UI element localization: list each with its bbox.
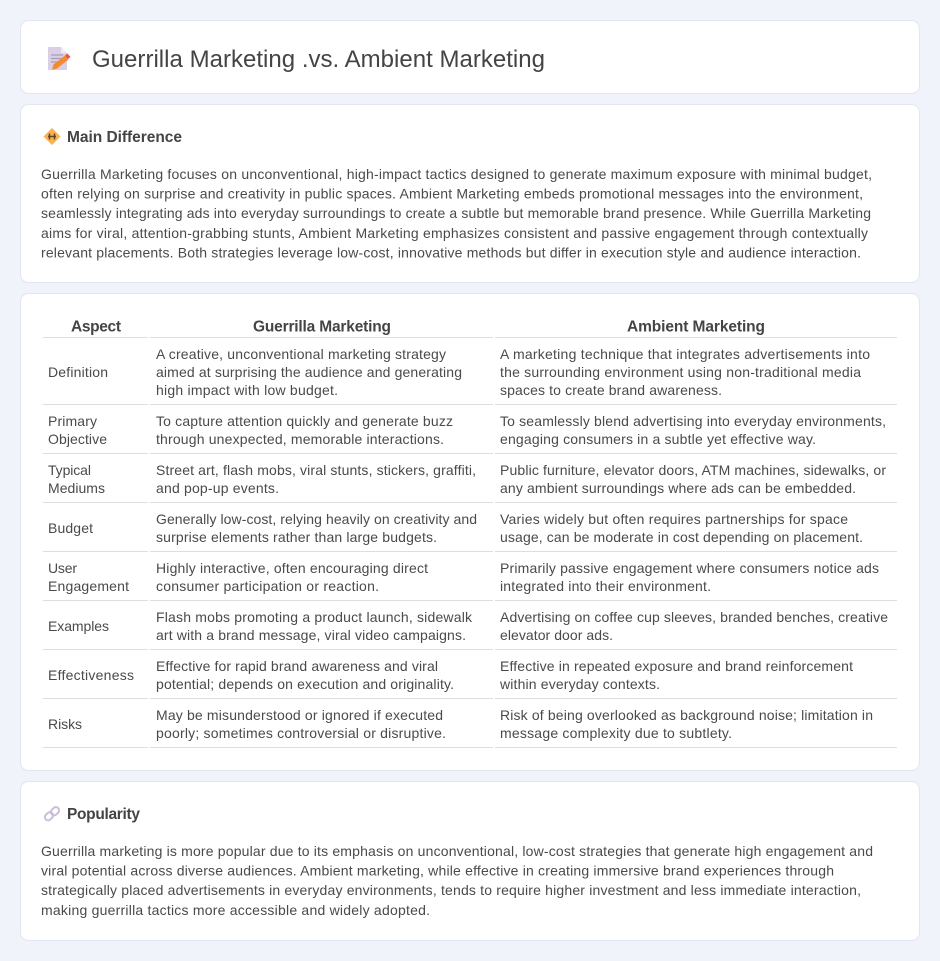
row: risks: [48, 707, 873, 741]
row: risks: poorly; sometimes controversial or disruptive.: [156, 725, 446, 741]
table header row: Ambient Marketing: [627, 318, 765, 336]
text block: main difference: often relying on surprise and creativity in public spaces. Ambient Marketing embeds promotional messages into the environment,: [41, 186, 863, 202]
icon: chain link: [44, 806, 60, 822]
row: definition: aimed at surprising the audience and generating: [156, 364, 462, 380]
row: definition: A marketing technique that integrates advertisements into: [500, 346, 870, 362]
panel: header: [20, 20, 920, 94]
row: budget: usage, can be moderate in cost depending on placement.: [500, 529, 863, 545]
row: typical mediums: and pop-up events.: [156, 480, 279, 496]
row: typical mediums: Street art, flash mobs, viral stunts, stickers, graffiti,: [156, 462, 476, 478]
row: typical mediums: Typical: [48, 462, 91, 478]
row: risks: May be misunderstood or ignored if executed: [156, 707, 443, 723]
row: user engagement: consumer participation or reaction.: [156, 578, 379, 594]
row: definition: Definition: [48, 364, 108, 380]
row: examples: Examples: [48, 618, 109, 634]
row: examples: Flash mobs promoting a product launch, sidewalk: [156, 609, 473, 625]
row: typical mediums: any ambient surroundings where ads can be embedded.: [500, 480, 856, 496]
text block: popularity: strategically placed advertisements in everyday environments, tends to require higher investment and less immediate interaction,: [41, 882, 861, 898]
row: definition: spaces to create brand awareness.: [500, 382, 722, 398]
row: user engagement: Primarily passive engagement where consumers notice ads: [500, 560, 879, 576]
row: primary objective: To capture attention quickly and generate buzz: [156, 413, 453, 429]
row: budget: Varies widely but often requires partnerships for space: [500, 511, 848, 527]
text block: main difference: aims for viral, attention-grabbing stunts, Ambient Marketing emphasizes consistent and passive engagement through contextually: [41, 225, 868, 241]
row: examples: Advertising on coffee cup sleeves, branded benches, creative: [500, 609, 888, 625]
text block: popularity: making guerrilla tactics more accessible and widely adopted.: [41, 902, 430, 918]
heading: popularity: Popularity: [67, 806, 140, 823]
text block: popularity: viral potential across diverse audiences. Ambient marketing, while effective in creating immersive brand experiences through: [41, 863, 834, 879]
text block: main difference: [41, 166, 872, 260]
row: examples: art with a brand message, viral video campaigns.: [156, 627, 466, 643]
row: typical mediums: [48, 462, 886, 496]
row: budget: Budget: [48, 520, 93, 536]
row: user engagement: [48, 560, 879, 594]
table header row: [71, 318, 765, 336]
row: effectiveness: potential; depends on execution and originality.: [156, 676, 454, 692]
row: effectiveness: within everyday contexts.: [499, 676, 660, 692]
row: examples: elevator door ads.: [500, 627, 613, 643]
text block: main difference: relevant placements. Both strategies leverage low-cost, innovative methods but differ in execution style and audience interaction.: [41, 244, 861, 260]
panel: comparison table: [20, 294, 920, 770]
row: user engagement: User: [48, 560, 77, 576]
text block: popularity: Guerrilla marketing is more popular due to its emphasis on unconventional, low-cost strategies that generate high engagement and: [41, 843, 873, 859]
text block: popularity: [41, 843, 873, 918]
text block: main difference: Guerrilla Marketing focuses on unconventional, high-impact tactics designed to generate maximum exposure with minimal budget,: [41, 166, 872, 182]
table header row: Guerrilla Marketing: [253, 318, 391, 336]
row: effectiveness: Effective for rapid brand awareness and viral: [156, 658, 438, 674]
row: definition: the surrounding environment using non-traditional media: [500, 364, 861, 380]
row: user engagement: integrated into their environment.: [500, 578, 711, 594]
row: primary objective: [48, 413, 886, 447]
row: primary objective: through unexpected, memorable interactions.: [156, 431, 444, 447]
title: Guerrilla Marketing .vs. Ambient Marketing: [92, 46, 545, 73]
row: risks: message complexity due to subtlety.: [500, 725, 732, 741]
row: definition: [48, 346, 870, 398]
text block: main difference: seamlessly integrating ads into everyday surroundings to create a subtle but memorable brand presence. While Guerrilla Marketing: [41, 205, 871, 221]
row: effectiveness: [48, 658, 853, 692]
row: definition: A creative, unconventional marketing strategy: [156, 346, 446, 362]
icon: orange diamond: [44, 128, 60, 145]
row: typical mediums: Public furniture, elevator doors, ATM machines, sidewalks, or: [500, 462, 886, 478]
icon: document with pencil: [48, 47, 70, 70]
panel: popularity: [20, 782, 920, 940]
row: primary objective: To seamlessly blend advertising into everyday environments,: [500, 413, 886, 429]
row: effectiveness: Effectiveness: [48, 667, 134, 683]
row: primary objective: Primary: [48, 413, 97, 429]
row: definition: high impact with low budget.: [156, 382, 338, 398]
row: typical mediums: Mediums: [48, 480, 105, 496]
row: risks: Risks: [48, 716, 82, 732]
row: user engagement: Engagement: [48, 578, 129, 594]
panel: main difference: [20, 104, 920, 282]
row: effectiveness: Effective in repeated exposure and brand reinforcement: [500, 658, 853, 674]
row: budget: Generally low-cost, relying heavily on creativity and: [156, 511, 477, 527]
table header row: Aspect: [71, 318, 121, 336]
row: user engagement: Highly interactive, often encouraging direct: [156, 560, 428, 576]
row: primary objective: engaging consumers in a subtle yet effective way.: [500, 431, 816, 447]
row: risks: Risk of being overlooked as background noise; limitation in: [500, 707, 873, 723]
row: budget: [48, 511, 863, 545]
row: examples: [48, 609, 888, 643]
row: primary objective: Objective: [48, 431, 107, 447]
heading: main difference: Main Difference: [67, 129, 182, 146]
row: budget: surprise elements rather than large budgets.: [156, 529, 437, 545]
